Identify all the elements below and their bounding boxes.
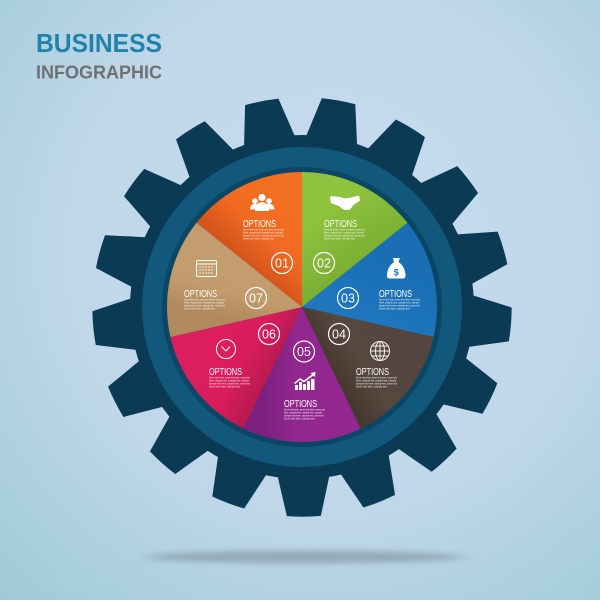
- text: options 07: Some text here, sample text: [184, 306, 215, 310]
- text: options 03: Sample text here, sample text, some text: [379, 304, 420, 308]
- text: options 03: Some text here, some text here, some text: [379, 298, 420, 302]
- outer blue ring: [142, 147, 462, 467]
- text: options 01: Some text here, some text here, some text: [243, 228, 284, 232]
- number 02: 02: [317, 256, 331, 270]
- text: options 07: Here, sample text, sample text, sample: [184, 300, 224, 304]
- text: options 02: Here, sample text, sample text, sample: [324, 230, 364, 234]
- text: options 05: Sample text here, sample text, some text: [284, 414, 324, 418]
- text: options 03: OPTIONS: [379, 289, 412, 300]
- text: options 02: Some text here, some text here, some text: [324, 228, 365, 232]
- text: options 01: Here, sample text, sample text, sample: [243, 230, 283, 234]
- icon: people: [250, 194, 274, 211]
- text: options 07: OPTIONS: [184, 289, 217, 300]
- text: options 06: OPTIONS: [209, 367, 242, 378]
- panel: 03 blue: [302, 223, 437, 337]
- inner dark ring: [162, 167, 442, 447]
- ground shadow: [145, 550, 465, 564]
- number 07: 07: [249, 292, 263, 306]
- text: options 01: OPTIONS: [243, 219, 276, 230]
- text: options 05: Here, sample text, sample text, sample: [284, 410, 322, 414]
- gear teeth: [90, 95, 513, 517]
- text: options 01: Sample text here, sample text, some text: [243, 234, 284, 238]
- icon: growth chart: [294, 372, 316, 390]
- text: options 07: [184, 289, 225, 310]
- text: options 06: Sample text here, sample text, some text: [209, 382, 250, 386]
- text: options 06: Here, sample text, sample text, sample: [209, 378, 249, 382]
- number 03: 03: [341, 292, 355, 306]
- text: options 03: Some text here, sample text: [379, 306, 410, 310]
- text: options 03: [379, 289, 420, 310]
- icon: handshake: [330, 196, 360, 210]
- icon: money bag: $: [394, 268, 399, 278]
- text: options 01: Some text here, sample text: [243, 236, 274, 240]
- text: options 04: OPTIONS: [356, 367, 389, 378]
- text: options 04: Sample text here, sample text, some text: [356, 382, 397, 386]
- text: options 07: Sample text here, sample text, some text: [184, 304, 225, 308]
- title: BUSINESS: [36, 30, 162, 58]
- text: options 04: Some text here, sample text: [356, 384, 387, 388]
- number 04: 04: [332, 328, 346, 342]
- text: options 04: [356, 367, 397, 388]
- number 06: 06: [262, 328, 276, 342]
- icon: globe: [370, 342, 390, 360]
- text: options 07: Some text here, some text here, some text: [184, 298, 225, 302]
- text: options 03: Here, sample text, sample text, sample: [379, 300, 419, 304]
- text: options 05: Some text here, sample text: [284, 416, 315, 420]
- text: options 06: Some text here, some text here, some text: [209, 376, 250, 380]
- text: options 05: Some text here, some text here, some text: [284, 408, 325, 412]
- title: INFOGRAPHIC: [36, 62, 162, 82]
- text: options 02: [324, 219, 365, 240]
- text: options 01: [243, 219, 284, 240]
- text: options 02: Sample text here, sample text, some text: [324, 234, 365, 238]
- text: options 02: OPTIONS: [324, 219, 357, 230]
- text: options 05: [284, 399, 325, 420]
- title: [36, 30, 162, 82]
- text: options 04: Some text here, some text here, some text: [356, 376, 397, 380]
- number 05: 05: [297, 345, 311, 359]
- panel: 04 brown: [302, 307, 434, 429]
- panel: 01 orange: [196, 172, 302, 307]
- panel: 05 purple: [243, 307, 361, 442]
- number 01: 01: [275, 256, 289, 270]
- panel: 06 pink: [170, 307, 302, 429]
- text: options 05: OPTIONS: [284, 399, 317, 410]
- text: options 02: Some text here, sample text: [324, 236, 355, 240]
- icon: clock: [216, 340, 236, 358]
- text: options 06: [209, 367, 250, 388]
- text: options 06: Some text here, sample text: [209, 384, 240, 388]
- panel: 07 tan: [167, 223, 302, 337]
- text: options 04: Here, sample text, sample text, sample: [356, 378, 396, 382]
- panel: 02 green: [302, 172, 408, 307]
- gear: [90, 95, 513, 517]
- icon: calendar: [196, 260, 216, 276]
